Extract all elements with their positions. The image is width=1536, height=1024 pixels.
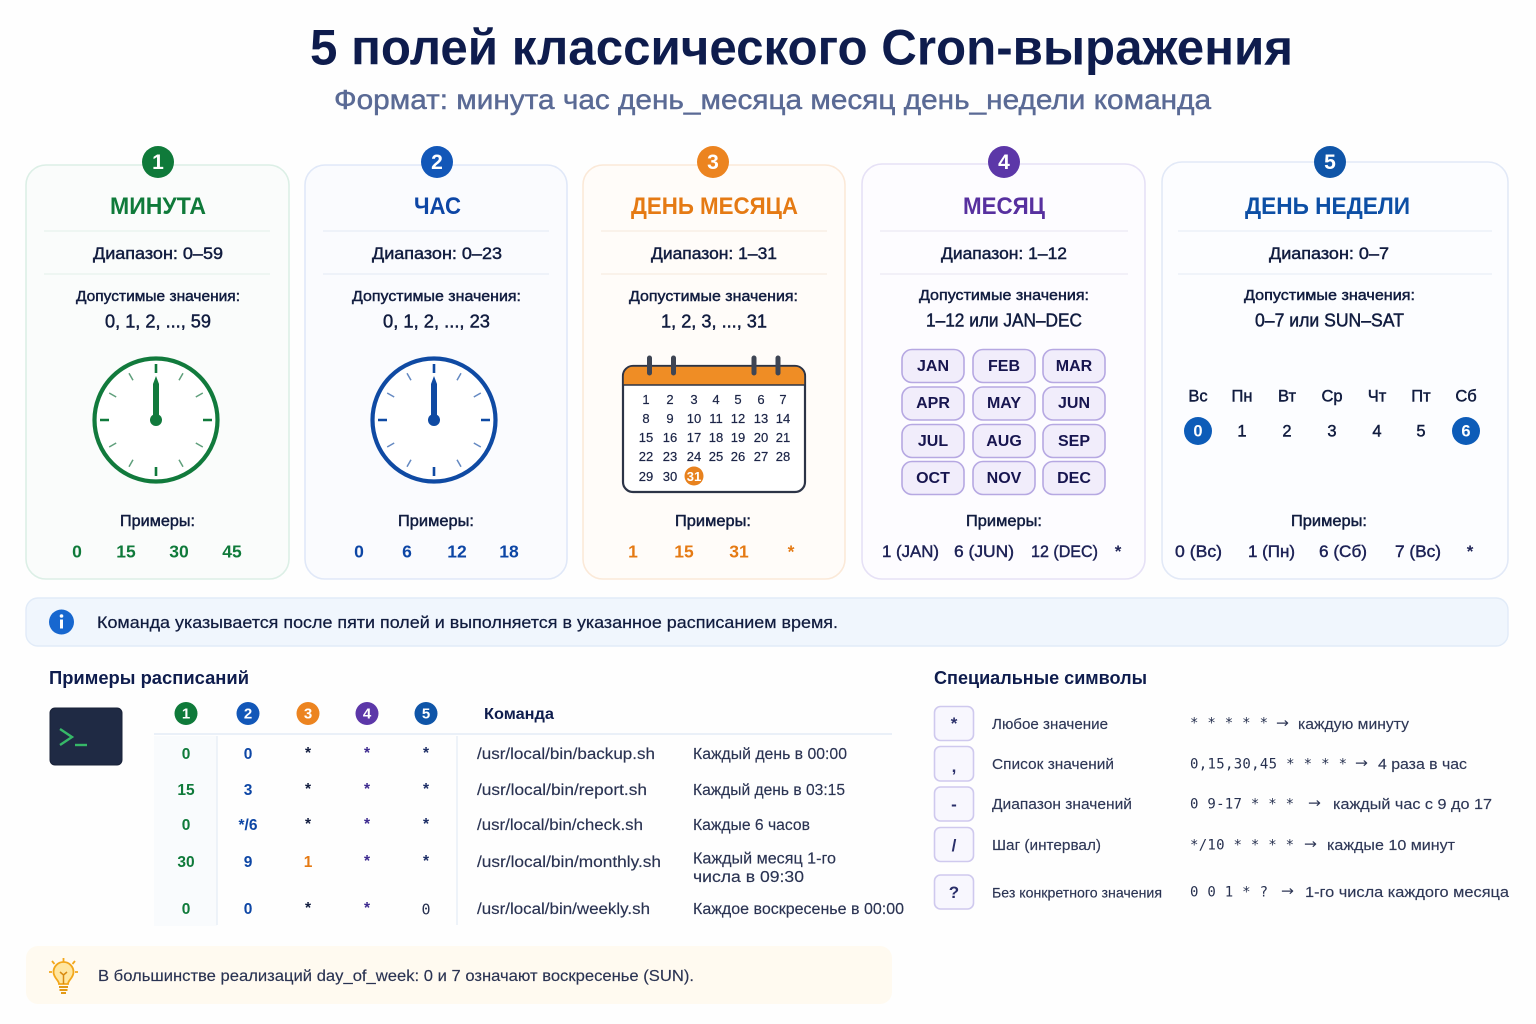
row: step: */10 * * * *: [1190, 838, 1294, 854]
row: step: →: [1304, 837, 1317, 853]
row: any value: Любое значение: [992, 716, 1108, 733]
row: range: [934, 787, 1492, 821]
allowed values: 0, 1, 2, ..., 23: [383, 312, 490, 332]
row: range: -: [951, 795, 957, 814]
row 4: 9: [244, 854, 253, 871]
examples: 15: [116, 542, 136, 562]
icon: calendar: 14: [776, 411, 790, 426]
icon: calendar: 26: [731, 449, 745, 464]
icon: light bulb: [49, 958, 78, 993]
row 4: 1: [304, 854, 313, 871]
badge 2: 2: [431, 151, 443, 174]
weekday grid: 0: [1193, 423, 1203, 441]
heading: Примеры расписаний: [49, 667, 249, 688]
weekday grid: Пт: [1411, 388, 1431, 406]
info text: Команда указывается после пяти полей и выполняется в указанное расписанием время.: [97, 613, 838, 632]
row 3: 0: [182, 817, 190, 834]
row 5: [182, 900, 904, 919]
allowed values: [629, 288, 798, 332]
examples: Примеры:: [966, 513, 1042, 530]
allowed values: Допустимые значения:: [919, 287, 1089, 304]
row: any value: каждую минуту: [1298, 716, 1410, 733]
examples: 0: [354, 542, 364, 562]
examples: 1 (JAN): [882, 542, 939, 561]
info bar: [26, 598, 1508, 646]
icon: calendar: 12: [731, 411, 745, 426]
allowed values: [1244, 287, 1415, 331]
examples: 15: [674, 542, 694, 562]
row 2: [177, 781, 845, 799]
row: range: →: [1308, 796, 1321, 812]
examples: 0: [72, 542, 82, 562]
icon: calendar: 25: [709, 449, 723, 464]
row 4: 30: [177, 854, 195, 871]
column badges: [174, 702, 438, 725]
icon: calendar: 29: [639, 469, 653, 484]
range: Диапазон: 1–12: [941, 244, 1067, 263]
row 5: /usr/local/bin/weekly.sh: [477, 901, 650, 918]
row 1: *: [423, 745, 430, 762]
icon: calendar: 9: [666, 411, 674, 426]
row 1: *: [305, 745, 312, 762]
row 1: [182, 745, 847, 763]
row: any value: [934, 706, 1410, 740]
row: step: Шаг (интервал): [992, 837, 1101, 854]
examples: [1175, 513, 1474, 561]
weekday grid: 2: [1282, 423, 1292, 441]
row 4: /usr/local/bin/monthly.sh: [477, 854, 661, 871]
allowed values: 1, 2, 3, ..., 31: [661, 312, 767, 332]
icon: calendar: 3: [690, 392, 698, 407]
icon: calendar: 8: [642, 411, 650, 426]
weekday grid: [1184, 388, 1480, 445]
weekday grid: Вс: [1188, 388, 1208, 406]
examples: 45: [222, 542, 242, 562]
row 3: */6: [239, 817, 258, 834]
month pills: AUG: [986, 433, 1022, 450]
month pills: SEP: [1058, 433, 1090, 450]
column badges: 3: [304, 706, 312, 723]
icon: calendar: 27: [754, 449, 768, 464]
row: step: /: [952, 836, 957, 855]
examples: 12 (DEC): [1031, 542, 1098, 561]
allowed values: 0, 1, 2, ..., 59: [105, 312, 211, 332]
row: any value: *: [951, 714, 958, 733]
examples: Примеры:: [120, 513, 195, 530]
row 5: *: [305, 900, 312, 917]
month pills: MAY: [987, 395, 1021, 412]
row 3: /usr/local/bin/check.sh: [477, 817, 643, 834]
examples: 1: [628, 542, 638, 562]
column badges: 2: [244, 706, 252, 723]
icon: calendar: 22: [639, 449, 653, 464]
icon: calendar: 13: [754, 411, 768, 426]
month pills: JAN: [917, 358, 949, 375]
examples: [882, 513, 1122, 561]
weekday grid: Ср: [1321, 388, 1343, 406]
row 1: /usr/local/bin/backup.sh: [477, 746, 655, 763]
icon: blue clock: [372, 358, 496, 482]
examples: 7 (Вс): [1395, 542, 1441, 561]
row: list: ,: [952, 757, 956, 776]
panel: day of week: [1162, 146, 1508, 579]
weekday grid: 1: [1237, 423, 1247, 441]
examples: 6: [402, 542, 412, 562]
examples: 0 (Вс): [1175, 542, 1222, 561]
allowed values: Допустимые значения:: [352, 288, 521, 305]
examples: *: [1115, 542, 1122, 561]
row: no specific value: 1-го числа каждого месяца: [1305, 884, 1510, 901]
icon: info: [49, 610, 74, 634]
weekday grid: Чт: [1368, 388, 1387, 406]
range: Диапазон: 0–59: [93, 244, 223, 263]
allowed values: [76, 288, 240, 332]
row 5: 0: [421, 901, 431, 919]
month pills: FEB: [988, 358, 1020, 375]
row 5: *: [364, 900, 371, 917]
command heading: Команда: [484, 706, 554, 723]
badge 5: 5: [1324, 151, 1336, 174]
icon: calendar: 2: [666, 392, 674, 407]
row 2: *: [364, 781, 371, 798]
icon: calendar: 6: [757, 392, 765, 407]
row 3: *: [423, 816, 430, 833]
panel: minute: [26, 146, 289, 579]
subtitle: Формат: минута час день_месяца месяц день_недели команда: [334, 84, 1211, 115]
examples: 18: [499, 542, 519, 562]
row: list: →: [1355, 756, 1368, 772]
allowed values: 1–12 или JAN–DEC: [926, 311, 1082, 331]
heading: day of month: ДЕНЬ МЕСЯЦА: [631, 193, 798, 220]
range: Диапазон: 0–23: [372, 244, 502, 263]
month pills: JUN: [1058, 395, 1090, 412]
icon: calendar: 20: [754, 430, 768, 445]
panel: day of month: [583, 146, 845, 579]
icon: calendar: [623, 358, 805, 492]
badge 3: [697, 146, 729, 178]
row 4: [177, 851, 836, 886]
month pills: OCT: [916, 470, 950, 487]
examples: [354, 513, 519, 562]
badge 1: [142, 146, 174, 178]
row 2: *: [305, 781, 312, 798]
icon: calendar: 15: [639, 430, 653, 445]
heading: minute: МИНУТА: [110, 193, 206, 220]
icon: calendar: 7: [779, 392, 787, 407]
icon: calendar: 4: [712, 392, 720, 407]
examples: 30: [169, 542, 189, 562]
badge 3: 3: [707, 151, 719, 174]
row 4: Каждый месяц 1-го: [693, 851, 836, 868]
row 1: 0: [244, 746, 252, 763]
row 2: 15: [177, 782, 195, 799]
tip bar: [26, 946, 892, 1004]
column badges: 1: [182, 706, 190, 723]
panel: month: [862, 146, 1145, 579]
row 3: [182, 816, 810, 834]
icon: calendar: 19: [731, 430, 745, 445]
examples: 6 (JUN): [954, 542, 1014, 561]
heading: day of week: ДЕНЬ НЕДЕЛИ: [1245, 193, 1410, 220]
icon: calendar: 10: [687, 411, 701, 426]
badge 5: [1314, 146, 1346, 178]
tip text: В большинстве реализаций day_of_week: 0 и 7 означают воскресенье (SUN).: [98, 968, 694, 985]
examples: *: [1467, 542, 1474, 561]
examples: 12: [447, 542, 467, 562]
examples: [628, 513, 795, 562]
row 4: числа в 09:30: [693, 869, 804, 886]
badge 2: [421, 146, 453, 178]
panel: schedule examples: [49, 667, 904, 926]
weekday grid: 3: [1327, 423, 1337, 441]
month pills: DEC: [1057, 470, 1091, 487]
row 5: 0: [244, 901, 252, 918]
row 5: 0: [182, 901, 190, 918]
range: Диапазон: 0–7: [1269, 244, 1389, 263]
icon: calendar: 18: [709, 430, 723, 445]
examples: *: [788, 542, 795, 562]
weekday grid: 6: [1461, 423, 1471, 441]
row: no specific value: Без конкретного значения: [992, 885, 1162, 901]
row 4: *: [423, 853, 430, 870]
allowed values: [352, 288, 521, 332]
row 3: *: [305, 816, 312, 833]
icon: calendar: 21: [776, 430, 790, 445]
icon: calendar: 24: [687, 449, 701, 464]
row: any value: →: [1276, 716, 1289, 732]
row: no specific value: [934, 875, 1510, 909]
allowed values: [919, 287, 1089, 331]
column badges: 4: [363, 706, 372, 723]
heading: Специальные символы: [934, 667, 1147, 688]
examples: [72, 513, 242, 562]
row: range: Диапазон значений: [992, 796, 1132, 813]
range: Диапазон: 1–31: [651, 244, 777, 263]
heading: hour: ЧАС: [414, 193, 461, 220]
row: no specific value: ?: [949, 883, 959, 902]
icon: calendar: 28: [776, 449, 790, 464]
row 1: *: [364, 745, 371, 762]
weekday grid: Вт: [1278, 388, 1296, 406]
row 1: Каждый день в 00:00: [693, 746, 847, 763]
row: list: Список значений: [992, 756, 1114, 773]
row: list: 4 раза в час: [1378, 756, 1468, 773]
examples: Примеры:: [398, 513, 474, 530]
row 1: 0: [182, 746, 190, 763]
row: any value: * * * * *: [1190, 716, 1268, 732]
title: 5 полей классического Cron-выражения: [310, 20, 1293, 76]
allowed values: Допустимые значения:: [1244, 287, 1415, 304]
badge 1: 1: [152, 151, 164, 174]
panel: hour: [305, 146, 567, 579]
month pills: [902, 350, 1105, 494]
allowed values: Допустимые значения:: [629, 288, 798, 305]
icon: calendar: 31: [687, 469, 701, 484]
weekday grid: 4: [1372, 423, 1382, 441]
row: step: каждые 10 минут: [1327, 837, 1455, 854]
icon: calendar: 1: [642, 392, 650, 407]
badge 4: 4: [998, 151, 1010, 174]
icon: calendar: 17: [687, 430, 701, 445]
weekday grid: 5: [1416, 423, 1426, 441]
row: no specific value: →: [1281, 884, 1294, 900]
weekday grid: Сб: [1455, 388, 1477, 406]
month pills: MAR: [1056, 358, 1093, 375]
row 2: Каждый день в 03:15: [693, 782, 845, 799]
icon: calendar: 16: [663, 430, 677, 445]
examples: 1 (Пн): [1248, 542, 1295, 561]
examples: 31: [729, 542, 749, 562]
weekday grid: Пн: [1232, 388, 1252, 406]
row 2: /usr/local/bin/report.sh: [477, 782, 647, 799]
row 5: Каждое воскресенье в 00:00: [693, 901, 904, 918]
icon: calendar: 23: [663, 449, 677, 464]
icon: green clock: [94, 358, 218, 482]
row: range: 0 9-17 * * *: [1190, 797, 1294, 813]
panel: special characters: [934, 667, 1510, 909]
row 3: Каждые 6 часов: [693, 817, 810, 834]
icon: calendar: 5: [734, 392, 742, 407]
examples: 6 (Сб): [1319, 542, 1367, 561]
row: no specific value: 0 0 1 * ?: [1190, 885, 1268, 901]
row 4: *: [364, 853, 371, 870]
examples: Примеры:: [1291, 513, 1367, 530]
examples: Примеры:: [675, 513, 751, 530]
row: step: [934, 828, 1455, 862]
allowed values: Допустимые значения:: [76, 288, 240, 305]
icon: calendar: 30: [663, 469, 677, 484]
row 2: *: [423, 781, 430, 798]
row 3: *: [364, 816, 371, 833]
month pills: NOV: [987, 470, 1022, 487]
icon: calendar: 11: [709, 411, 723, 426]
column badges: 5: [422, 706, 430, 723]
row: range: каждый час с 9 до 17: [1333, 796, 1492, 813]
row: list: 0,15,30,45 * * * *: [1190, 757, 1347, 773]
row 2: 3: [244, 782, 253, 799]
row: list: [934, 746, 1468, 781]
heading: month: МЕСЯЦ: [963, 193, 1045, 220]
table: [154, 702, 904, 926]
icon: terminal: [50, 708, 122, 765]
allowed values: 0–7 или SUN–SAT: [1255, 311, 1404, 331]
month pills: JUL: [918, 433, 948, 450]
badge 4: [988, 146, 1020, 178]
month pills: APR: [916, 395, 950, 412]
